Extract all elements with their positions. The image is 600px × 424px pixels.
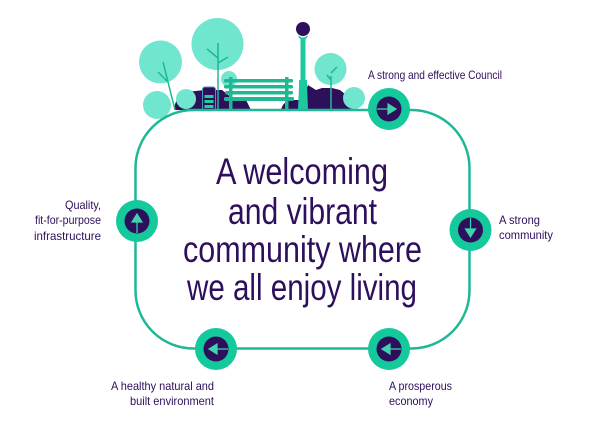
park illustration (139, 18, 365, 119)
bin (202, 87, 216, 110)
title: and vibrant (228, 191, 378, 232)
label: A prosperous economy (389, 379, 452, 408)
label: A strong community (499, 213, 553, 242)
label: A strong and effective Council: A strong and effective Council (368, 68, 502, 82)
lamp post (296, 22, 310, 110)
bench (224, 77, 294, 110)
label: A healthy natural and built environment (111, 379, 215, 408)
label: Quality, fit-for-purpose infrastructure: Quality, (65, 198, 101, 212)
label: Quality, fit-for-purpose infrastructure (34, 198, 101, 243)
tree left (139, 40, 196, 119)
label: A prosperous economy: A prosperous (389, 379, 452, 393)
title: we all enjoy living (186, 267, 417, 308)
title: community where (183, 229, 422, 270)
label: A strong community: A strong (499, 213, 540, 227)
label: A healthy natural and built environment: A healthy natural and (111, 379, 214, 393)
title: A welcoming (216, 151, 388, 192)
dark bushes (174, 85, 353, 110)
label: Quality, fit-for-purpose infrastructure: fit-for-purpose (35, 213, 101, 227)
tree right (314, 53, 365, 110)
label: A healthy natural and built environment: built environment (130, 394, 215, 408)
node: healthy environment (195, 328, 237, 370)
label: A strong community: community (499, 228, 553, 242)
circular path (136, 110, 470, 348)
node: strong community (450, 209, 492, 251)
node: infrastructure (116, 200, 158, 242)
tree tall (192, 18, 244, 110)
label: A prosperous economy: economy (389, 394, 433, 408)
title (183, 151, 422, 308)
label: Quality, fit-for-purpose infrastructure: infrastructure (34, 229, 101, 243)
node: prosperous economy (368, 328, 410, 370)
node: strong Council (368, 88, 410, 130)
